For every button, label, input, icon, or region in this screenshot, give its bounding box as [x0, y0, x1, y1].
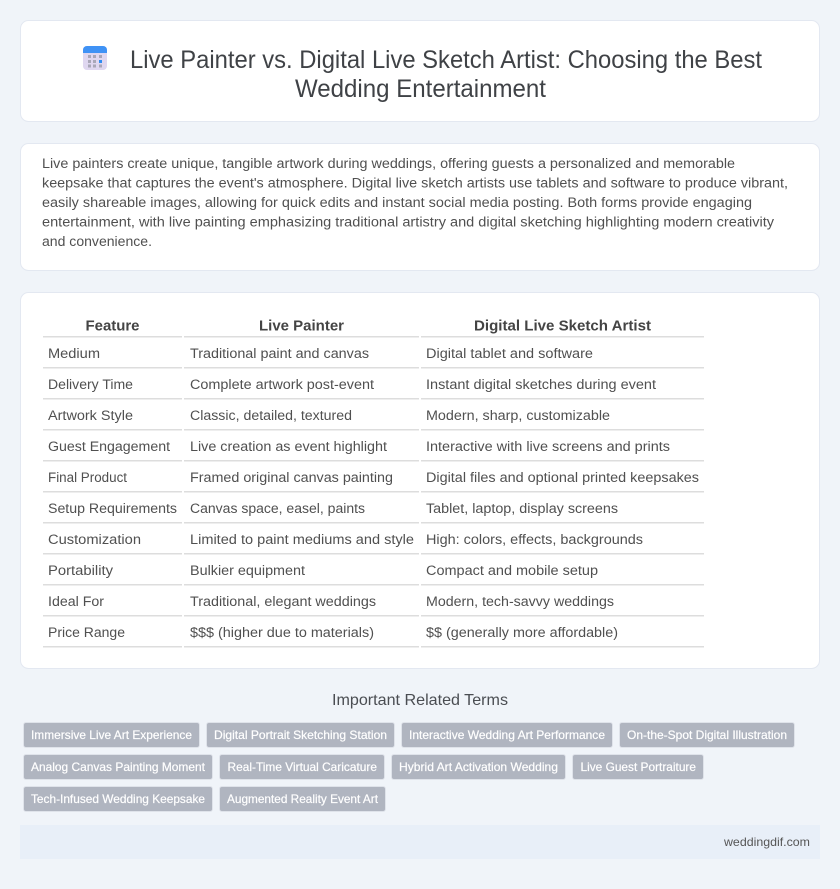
table header row: Digital Live Sketch Artist: [474, 318, 651, 334]
table header row: Live Painter: [259, 318, 344, 334]
table row: Setup Requirements: Tablet, laptop, display screens: [426, 501, 618, 517]
table row: Artwork Style: Modern, sharp, customizable: [426, 408, 610, 424]
title: [130, 46, 762, 103]
tag: Analog Canvas Painting Moment: Analog Canvas Painting Moment: [31, 761, 206, 774]
tag: Tech-Infused Wedding Keepsake: [24, 786, 212, 812]
table row: Setup Requirements: Canvas space, easel, paints: [190, 501, 365, 517]
table row: Portability: Compact and mobile setup: [426, 563, 598, 579]
text block: introduction paragraph: easily shareable images, allowing for quick edits and instant social media posting. Both forms provide engaging: [42, 195, 752, 211]
text block: introduction paragraph: keepsake that captures the event's atmosphere. Digital live sketch artists use tablets and software to produce vibrant,: [42, 176, 788, 192]
title: Wedding Entertainment: [295, 75, 546, 103]
heading: related terms: Important Related Terms: [332, 692, 508, 709]
tag: Immersive Live Art Experience: [24, 722, 200, 748]
table row: Final Product: Framed original canvas painting: [190, 470, 393, 486]
table row: Medium: Traditional paint and canvas: [190, 346, 369, 362]
tag: Tech-Infused Wedding Keepsake: Tech-Infused Wedding Keepsake: [31, 793, 205, 806]
table row: Ideal For: Traditional, elegant weddings: [190, 594, 376, 610]
tag: Live Guest Portraiture: [572, 754, 704, 780]
table row: Setup Requirements: Setup Requirements: [48, 501, 177, 517]
table row: Final Product: Digital files and optional printed keepsakes: [426, 470, 699, 486]
table row: Customization: Customization: [48, 532, 141, 548]
table row: Ideal For: [48, 594, 614, 610]
panel: comparison table: [20, 292, 820, 668]
table row: Portability: [48, 563, 598, 579]
table row: Medium: Digital tablet and software: [426, 346, 593, 362]
table row: Artwork Style: [48, 408, 610, 424]
tag: Digital Portrait Sketching Station: [206, 722, 394, 748]
tag list: related terms: [24, 722, 794, 812]
table header row: [86, 318, 651, 334]
tag: Digital Portrait Sketching Station: Digital Portrait Sketching Station: [214, 729, 387, 742]
tag: Augmented Reality Event Art: Augmented Reality Event Art: [227, 793, 379, 806]
table row: Delivery Time: Instant digital sketches during event: [426, 377, 656, 393]
table row: Customization: High: colors, effects, backgrounds: [426, 532, 643, 548]
table row: Ideal For: Ideal For: [48, 594, 104, 610]
title: Live Painter vs. Digital Live Sketch Artist: Choosing the Best: [130, 46, 762, 74]
footer source text: weddingdif.com: [723, 835, 810, 849]
table row: Price Range: Price Range: [48, 625, 125, 641]
table row: Guest Engagement: Guest Engagement: [48, 439, 170, 455]
table row: Portability: Bulkier equipment: [190, 563, 305, 579]
table row: Guest Engagement: Interactive with live screens and prints: [426, 439, 670, 455]
panel: title header: [20, 20, 820, 122]
footer bar: [20, 825, 820, 859]
table row: Price Range: [48, 625, 618, 641]
table row: Ideal For: Modern, tech-savvy weddings: [426, 594, 614, 610]
tag: Real-Time Virtual Caricature: Real-Time Virtual Caricature: [228, 761, 377, 774]
table row: Guest Engagement: Live creation as event highlight: [190, 439, 387, 455]
text block: introduction paragraph: entertainment, with live painting emphasizing traditional artistry and digital sketching highlighting modern creativity: [42, 214, 775, 230]
tag: On-the-Spot Digital Illustration: On-the-Spot Digital Illustration: [627, 729, 787, 742]
panel: introduction: [20, 144, 820, 270]
tag: Augmented Reality Event Art: [220, 786, 386, 812]
table row: Final Product: [48, 470, 699, 486]
tag: Immersive Live Art Experience: Immersive Live Art Experience: [31, 729, 192, 742]
text block: introduction paragraph: and convenience.: [42, 234, 152, 250]
table row: Price Range: $$ (generally more affordable): [426, 625, 618, 641]
table row: Customization: Limited to paint mediums and style: [190, 532, 414, 548]
table row: Setup Requirements: [48, 501, 618, 517]
table row: Delivery Time: Complete artwork post-event: [190, 377, 374, 393]
tag: Interactive Wedding Art Performance: Interactive Wedding Art Performance: [409, 729, 605, 742]
table row: Artwork Style: Artwork Style: [48, 408, 133, 424]
table row: Artwork Style: Classic, detailed, textured: [190, 408, 352, 424]
tag: Analog Canvas Painting Moment: [24, 754, 212, 780]
table row: Portability: Portability: [48, 563, 114, 579]
table header row: Feature: [86, 318, 140, 334]
tag: Hybrid Art Activation Wedding: [392, 754, 566, 780]
table row: Medium: Medium: [48, 346, 100, 362]
table row: Delivery Time: Delivery Time: [48, 377, 133, 393]
table row: Medium: [48, 346, 593, 362]
tag: Interactive Wedding Art Performance: [402, 722, 612, 748]
table row: Final Product: Final Product: [48, 470, 127, 486]
table row: Delivery Time: [48, 377, 656, 393]
table row: Price Range: $$$ (higher due to materials): [190, 625, 374, 641]
table row: Customization: [48, 532, 643, 548]
text block: introduction paragraph: [42, 156, 788, 250]
table row: Guest Engagement: [48, 439, 670, 455]
tag: On-the-Spot Digital Illustration: [620, 722, 794, 748]
tag: Real-Time Virtual Caricature: [220, 754, 384, 780]
icon: calendar: [83, 46, 107, 70]
tag: Live Guest Portraiture: Live Guest Portraiture: [580, 761, 696, 774]
tag: Hybrid Art Activation Wedding: Hybrid Art Activation Wedding: [399, 761, 558, 774]
text block: introduction paragraph: Live painters create unique, tangible artwork during weddings, offering guests a personalized and memorable: [42, 156, 735, 172]
